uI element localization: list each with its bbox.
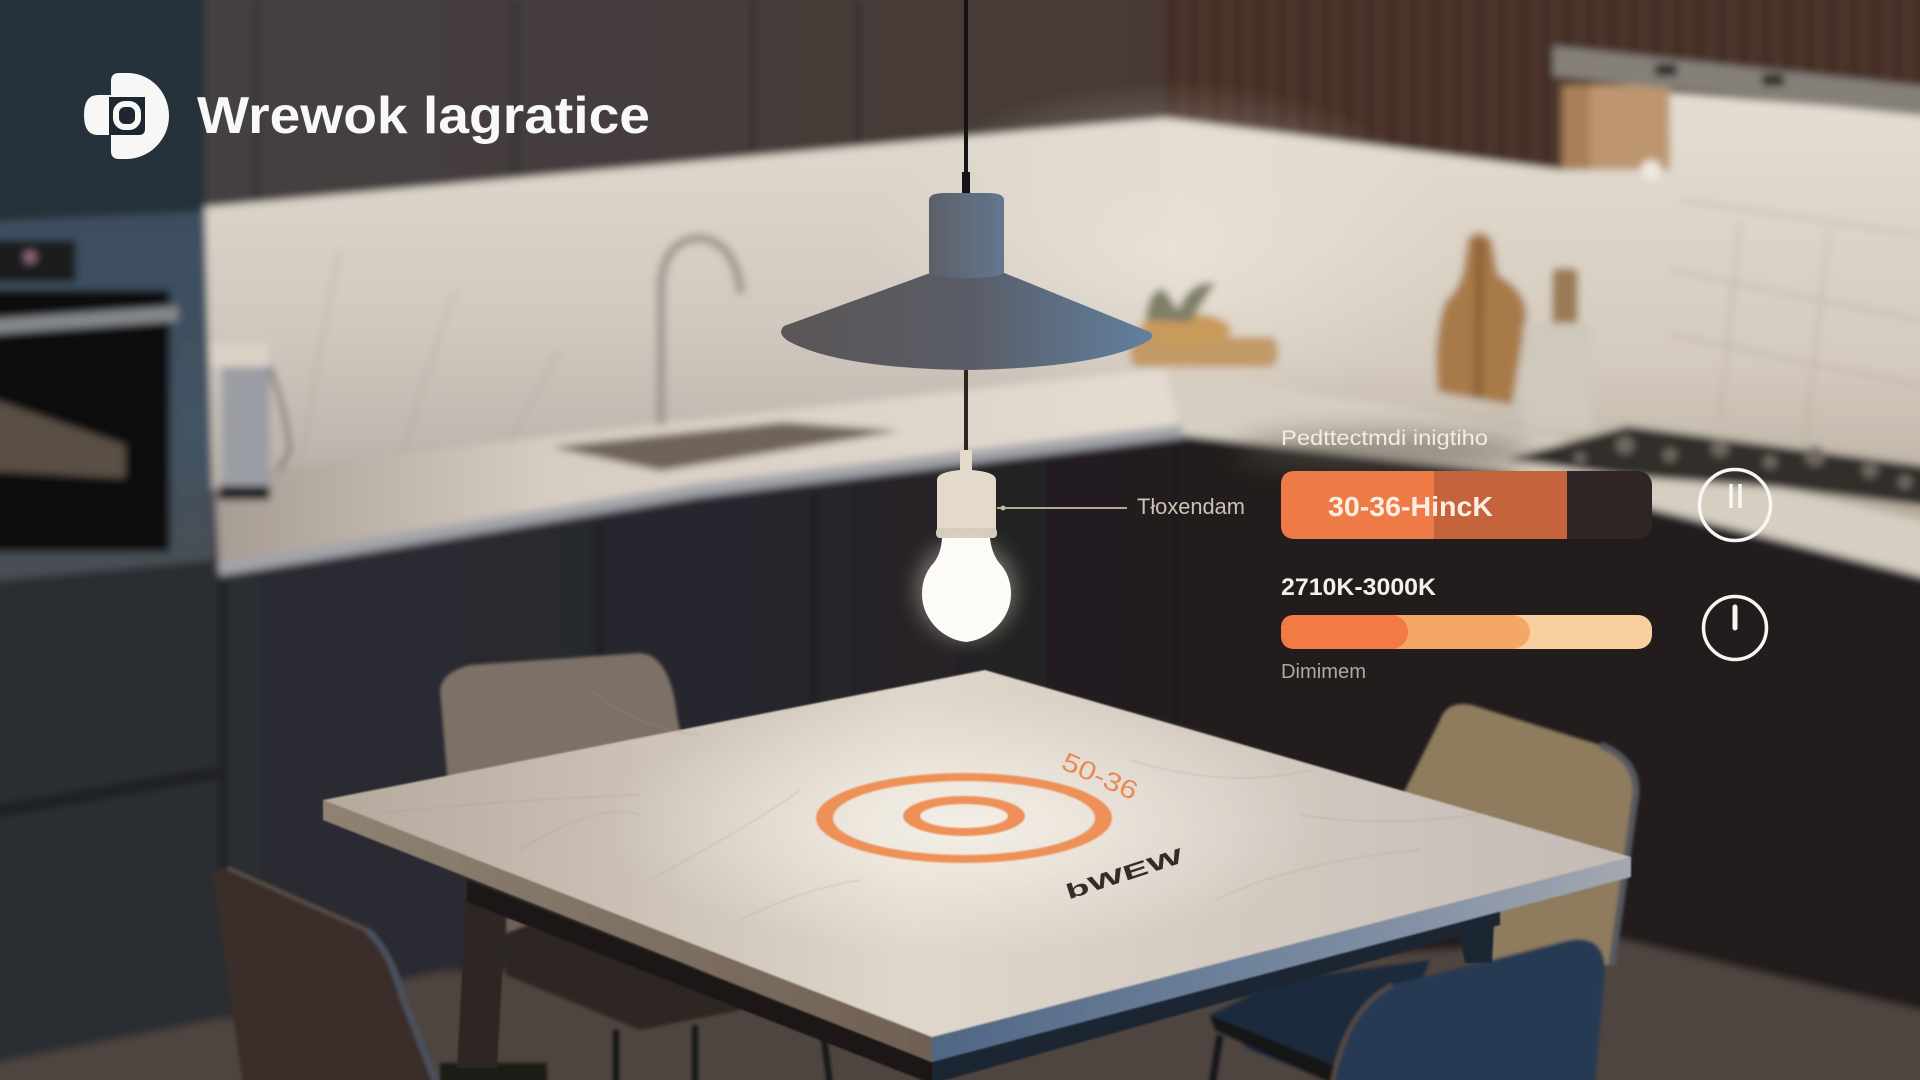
lower drawers	[0, 562, 223, 1066]
back right chair back	[1400, 704, 1636, 965]
bulb glow	[916, 540, 1016, 640]
table caption: bWEW	[1063, 845, 1186, 904]
wood panel under hood	[1562, 85, 1670, 170]
lamp cap	[929, 193, 1004, 278]
chairs	[213, 653, 1636, 1080]
pause icon	[1700, 470, 1770, 540]
sink	[551, 422, 900, 471]
upper cabinets centre	[205, 0, 1170, 209]
heading backdrop shading	[1235, 432, 1535, 472]
logo icon	[84, 73, 169, 159]
left backsplash	[205, 118, 1170, 490]
cabinet seams	[600, 440, 1850, 990]
title: Wrewok lagratice	[197, 87, 650, 145]
kettle	[222, 363, 270, 493]
oven handle	[0, 306, 178, 335]
panel heading: Pedttectmdi inigtiho	[1281, 427, 1488, 450]
oven panel	[0, 240, 76, 282]
upper wood cabinets right	[1165, 0, 1920, 180]
power icon	[1704, 596, 1766, 660]
colour temperature label: 2710K-3000K	[1281, 574, 1437, 601]
light pool rings on table	[816, 773, 1112, 863]
oven body	[0, 212, 214, 582]
back left chair back	[440, 653, 695, 810]
tile lines right	[1670, 200, 1920, 480]
floor	[0, 940, 1920, 1080]
front right chair seat	[1210, 960, 1430, 1080]
oven door	[0, 290, 170, 552]
lower cord	[964, 370, 968, 452]
lamp shade	[781, 272, 1152, 370]
backsplash brightness near corner	[865, 80, 1465, 420]
pendant lamp	[781, 0, 1152, 642]
oven window reflection	[0, 395, 125, 478]
brightness bar	[1281, 471, 1652, 539]
brightness bar: 30-36-HincK	[1328, 491, 1493, 522]
right backsplash	[1165, 87, 1920, 540]
control panel	[1281, 427, 1770, 683]
dimming label: Dimimem	[1281, 661, 1366, 683]
range hood	[1553, 46, 1920, 118]
faucet	[661, 238, 741, 425]
bottle	[1523, 323, 1592, 430]
wall light blob	[1641, 160, 1661, 180]
counter left	[215, 368, 1182, 573]
front right chair back	[1332, 939, 1605, 1080]
marble veins left	[300, 250, 560, 480]
socket	[937, 450, 996, 532]
callout line	[997, 506, 1127, 510]
table legs and frame	[457, 880, 1500, 1080]
counter front edge	[219, 431, 1182, 570]
callout label: Tłoxendam	[1137, 494, 1245, 519]
front left chair	[213, 867, 437, 1080]
bulb	[922, 538, 1011, 642]
back left chair seat	[506, 917, 620, 962]
cutting board	[1436, 232, 1526, 405]
table value label: 50-36	[1057, 746, 1143, 806]
colour temperature bar	[1281, 615, 1652, 649]
stove	[1506, 426, 1920, 508]
cabinet plank shadows	[257, 0, 858, 200]
lower cabinets left	[205, 440, 1182, 1020]
lower cabinets right	[1182, 440, 1920, 1015]
lamp cord	[964, 0, 968, 192]
plant tray	[1130, 337, 1278, 367]
utensils	[1552, 268, 1578, 328]
tall cabinet	[0, 0, 205, 216]
table top	[323, 670, 1631, 1062]
counter right	[1165, 368, 1920, 581]
